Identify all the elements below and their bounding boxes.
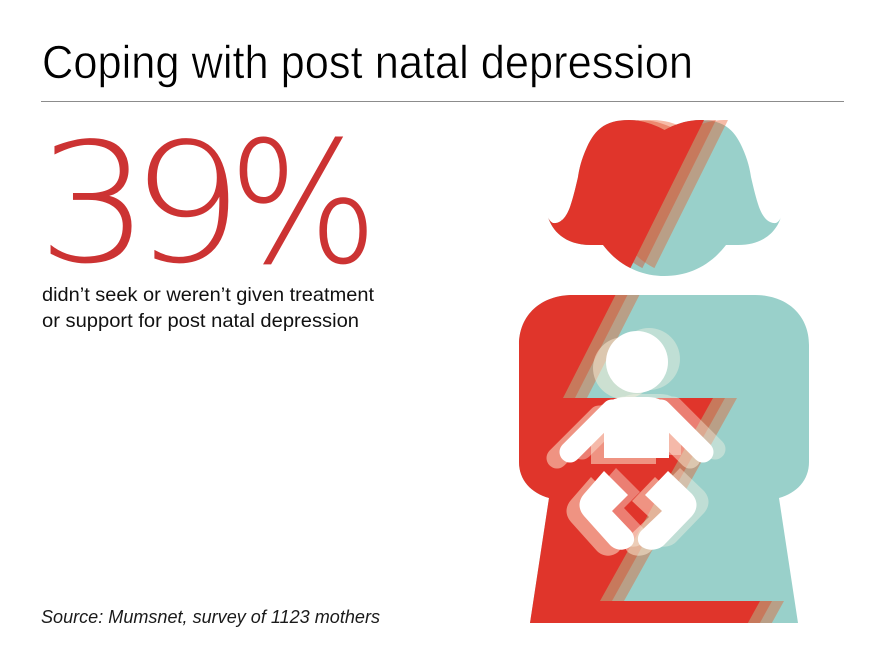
baby icon [570, 331, 703, 550]
mother silhouette: red half with lightning edge [519, 120, 760, 623]
offset red echo, far [563, 120, 784, 623]
baby ghost, left [557, 337, 690, 556]
big statistic: 39%: 9 [130, 107, 244, 300]
statistic description: didn’t seek or weren’t given treatment [42, 284, 375, 306]
big statistic: 39% [37, 105, 379, 302]
source note: Source: Mumsnet, survey of 1123 mothers [41, 607, 380, 627]
statistic description [42, 284, 375, 332]
baby ghost, right [582, 328, 715, 547]
statistic description: or support for post natal depression [42, 310, 359, 332]
mother silhouette: teal base [519, 120, 809, 623]
big statistic: 39%: 3 [37, 107, 150, 300]
big statistic: 39%: % [228, 105, 379, 302]
mother and baby figure [519, 120, 833, 623]
title: Coping with post natal depression [42, 36, 693, 88]
divider rule [41, 101, 844, 102]
offset red echo, near [560, 120, 772, 623]
